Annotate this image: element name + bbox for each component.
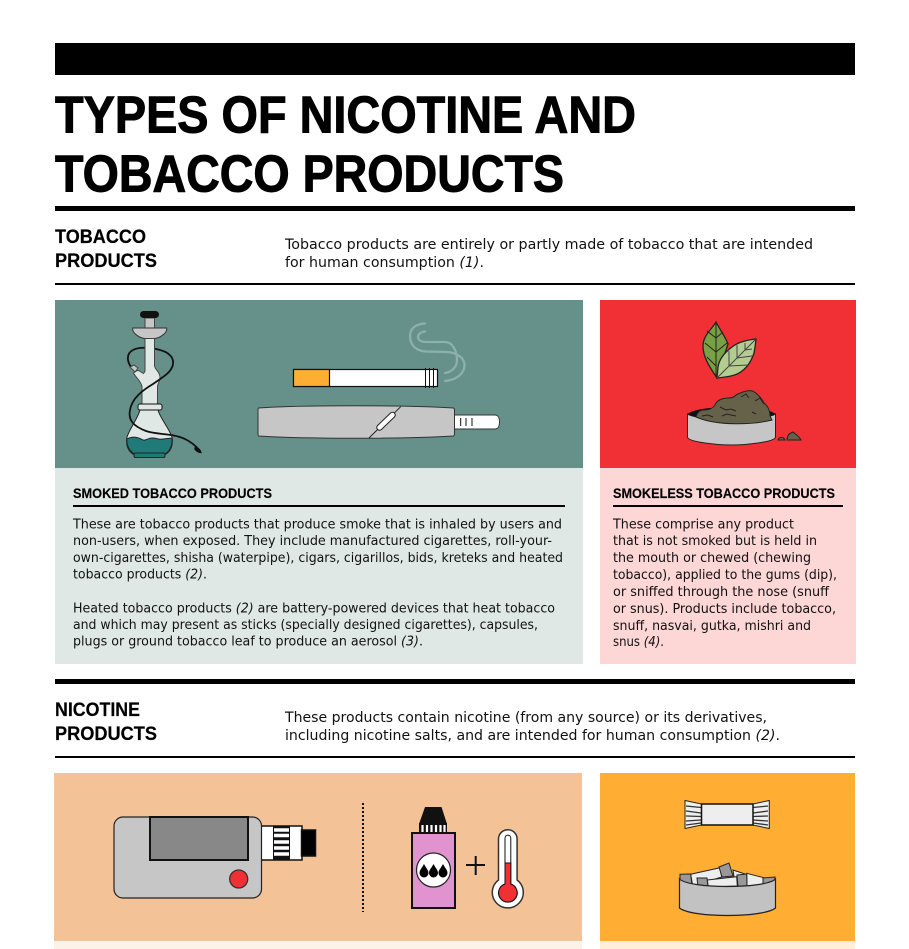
heading: smokeless tobacco products: SMOKELESS TOBACCO PRODUCTS xyxy=(613,485,835,501)
text: smoked tobacco description: These are tobacco products that produce smoke that is inhaled by users and xyxy=(72,516,562,532)
text: smokeless tobacco description: tobacco), applied to the gums (dip), xyxy=(613,567,837,583)
text: smoked tobacco description xyxy=(72,516,563,650)
heading: nicotine products: NICOTINE xyxy=(55,699,140,721)
title xyxy=(55,86,636,202)
text: smokeless tobacco description xyxy=(612,516,837,650)
icon: e-liquid bottle xyxy=(412,807,455,908)
heading: nicotine products xyxy=(55,699,157,745)
text: smokeless tobacco description: snuff, nasvai, gutka, mishri and xyxy=(613,618,811,634)
text: smoked tobacco description: and which may present as sticks (specially designed cigarettes), capsules, xyxy=(73,617,538,633)
icon: tobacco leaves xyxy=(703,322,756,378)
panel: smokeless tobacco products xyxy=(600,300,856,664)
icon: tin with snuff xyxy=(688,391,801,445)
text: tobacco products intro xyxy=(284,237,813,271)
text: smoked tobacco description: own-cigarettes, shisha (waterpipe), cigars, cigarillos, bids, kreteks and heated xyxy=(73,550,563,566)
text: nicotine products intro xyxy=(284,710,780,744)
text: smokeless tobacco description: snus (4). xyxy=(613,634,664,650)
text: smoked tobacco description: tobacco products (2). xyxy=(73,566,207,582)
heading: tobacco products xyxy=(55,226,157,272)
text: nicotine products intro: including nicotine salts, and are intended for human consumption (2). xyxy=(285,728,780,744)
icon: plus xyxy=(466,856,485,875)
icon: thermometer xyxy=(492,830,523,908)
title: TOBACCO PRODUCTS xyxy=(55,144,564,202)
heading: tobacco products: TOBACCO xyxy=(55,226,146,248)
heading: smoked tobacco products: SMOKED TOBACCO PRODUCTS xyxy=(73,485,272,501)
text: smoked tobacco description: non-users, when exposed. They include manufactured cigarettes, roll-your- xyxy=(73,533,552,549)
text: tobacco products intro: Tobacco products are entirely or partly made of tobacco that are intended xyxy=(284,237,813,253)
panel: electronic nicotine products xyxy=(54,773,582,949)
icon: nicotine pouch xyxy=(685,800,769,828)
text: smoked tobacco description: Heated tobacco products (2) are battery-powered devices that heat tobacco xyxy=(73,600,555,616)
icon: vaping device xyxy=(114,817,316,898)
text: smoked tobacco description: plugs or ground tobacco leaf to produce an aerosol (3). xyxy=(73,634,423,650)
text: smokeless tobacco description: the mouth or chewed (chewing xyxy=(613,550,811,566)
text: smokeless tobacco description: that is not smoked but is held in xyxy=(613,533,817,549)
text: smokeless tobacco description: or snus). Products include tobacco, xyxy=(613,601,836,617)
dotted divider xyxy=(362,803,364,912)
text: nicotine products intro: These products contain nicotine (from any source) or its derivatives, xyxy=(284,710,767,726)
top black banner xyxy=(55,43,855,75)
title: TYPES OF NICOTINE AND xyxy=(55,86,636,144)
text: tobacco products intro: for human consumption (1). xyxy=(285,255,484,271)
panel: oral nicotine pouches xyxy=(600,773,855,949)
text: smokeless tobacco description: These comprise any product xyxy=(612,516,795,532)
icon: smoke xyxy=(410,324,464,381)
icon: cigarette xyxy=(294,368,438,388)
icon: heated tobacco device xyxy=(258,406,500,438)
heading: tobacco products: PRODUCTS xyxy=(55,250,157,272)
icon: hookah xyxy=(127,311,202,458)
text: smokeless tobacco description: or sniffed through the nose (snuff xyxy=(613,584,830,600)
heading: nicotine products: PRODUCTS xyxy=(55,723,157,745)
icon: tin with pouches xyxy=(680,863,776,916)
panel: smoked tobacco products xyxy=(55,300,583,664)
